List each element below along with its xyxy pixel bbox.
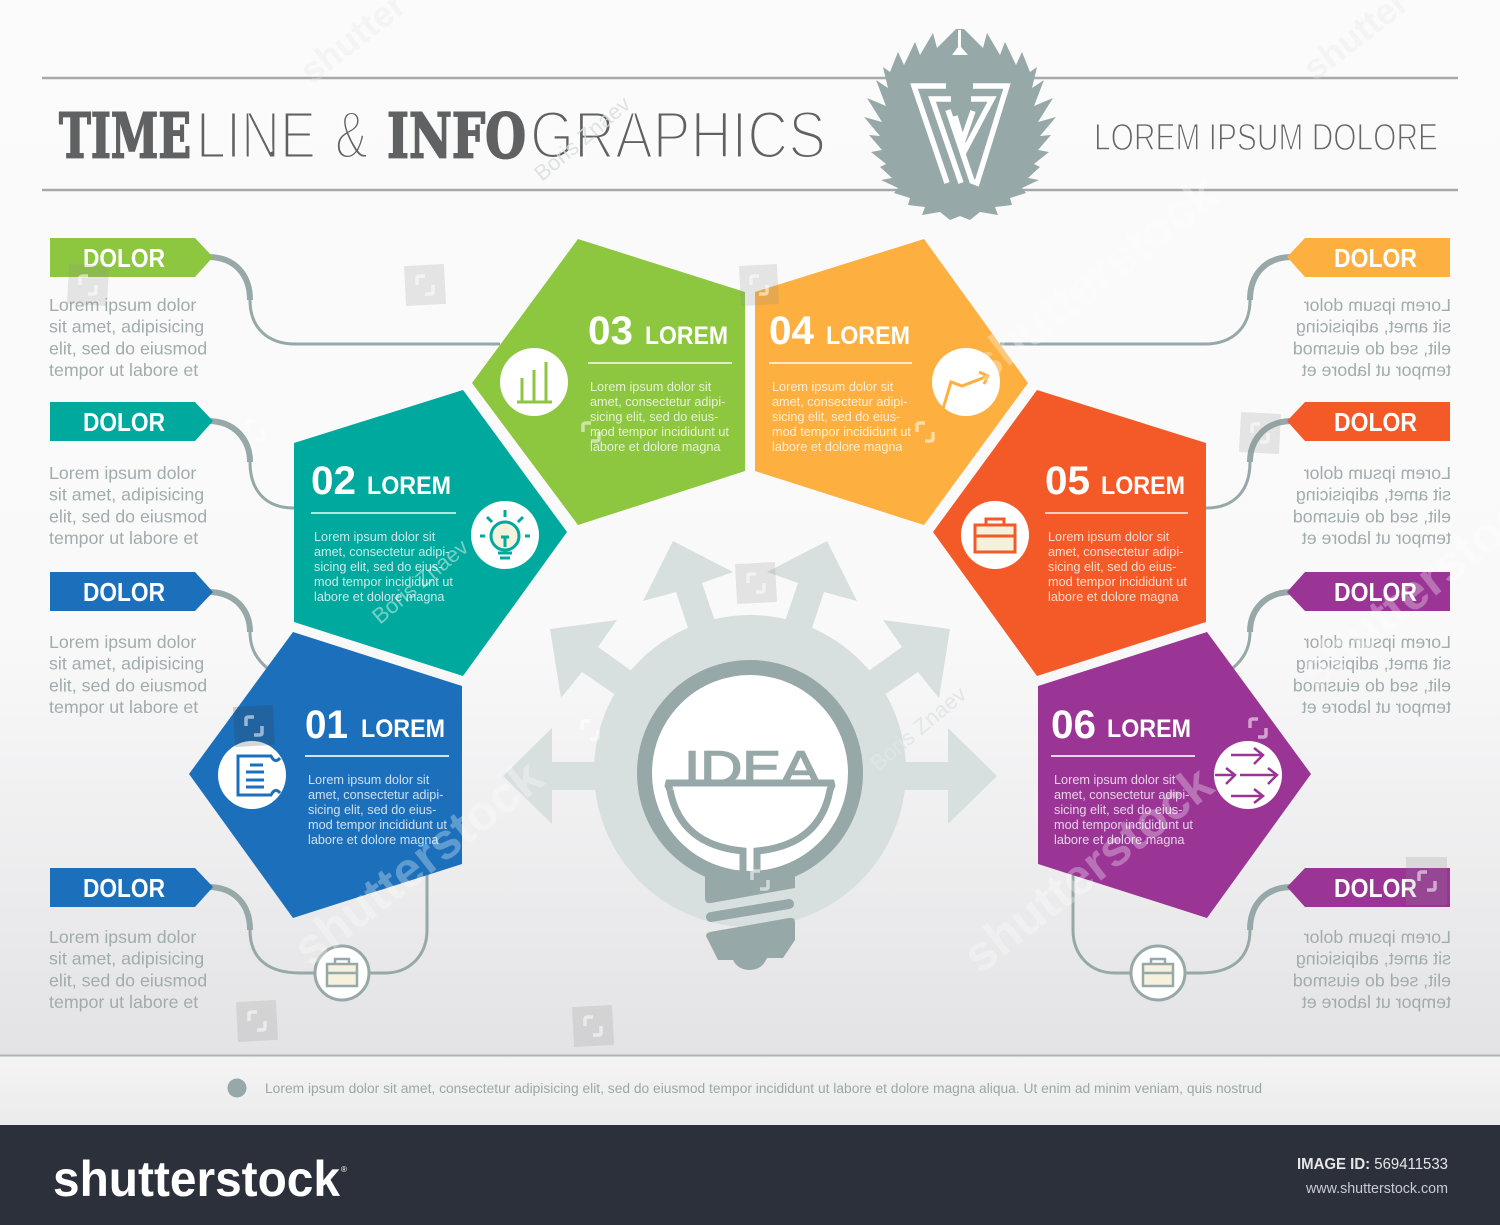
tag: dolor green: DOLOR	[83, 243, 165, 273]
title: &	[335, 98, 368, 173]
tag: dolor blue	[50, 572, 213, 611]
body 06: Lorem ipsum dolor sit	[1054, 773, 1176, 787]
footer bar	[0, 1125, 1500, 1225]
body 06: labore et dolore magna	[1054, 833, 1185, 847]
heading 04: LOREM	[826, 322, 910, 350]
tag: dolor blue lower: DOLOR	[83, 873, 165, 903]
watermarks: Boris Znaev	[865, 681, 971, 776]
footnote text: Lorem ipsum dolor sit amet, consectetur adipisicing elit, sed do eiusmod tempor incididunt ut labore et dolore magna aliqua. Ut enim ad minim veniam, quis nostrud	[265, 1081, 1262, 1096]
body 02: mod tempor incididunt ut	[314, 575, 453, 589]
icon: briefcase node right	[1131, 946, 1185, 1000]
heading 05	[1045, 459, 1185, 503]
body 04: mod tempor incididunt ut	[772, 425, 911, 439]
body 06: mod tempor incididunt ut	[1054, 818, 1193, 832]
body 01: mod tempor incididunt ut	[308, 818, 447, 832]
arrows around bulb	[503, 541, 997, 927]
body 06: sicing elit, sed do eius-	[1054, 803, 1182, 817]
tag: dolor purple: DOLOR	[1334, 577, 1417, 607]
body 01: labore et dolore magna	[308, 833, 439, 847]
body 04: Lorem ipsum dolor sit	[772, 380, 894, 394]
side text right mirrored 3: elit, sed do eiusmod	[1293, 675, 1451, 695]
watermarks: shutterstock	[957, 165, 1228, 394]
side text left 4: tempor ut labore et	[49, 992, 198, 1012]
tag: dolor amber: DOLOR	[1334, 243, 1417, 273]
body 03: Lorem ipsum dolor sit	[590, 380, 712, 394]
side text right mirrored 1: elit, sed do eiusmod	[1293, 338, 1451, 358]
heading 06: 06	[1051, 703, 1096, 747]
side text right mirrored 1: tempor ut labore et	[1302, 360, 1451, 380]
body 02: sicing elit, sed do eius-	[314, 560, 442, 574]
side text left 2: tempor ut labore et	[49, 528, 198, 548]
body 02: Lorem ipsum dolor sit	[314, 530, 436, 544]
panel 05	[933, 390, 1206, 676]
side text left 1: Lorem ipsum dolor	[49, 295, 196, 315]
title	[59, 98, 826, 173]
body 04: sicing elit, sed do eius-	[772, 410, 900, 424]
side text left 2: sit amet, adipisicing	[49, 485, 204, 505]
tag: dolor teal: DOLOR	[83, 407, 165, 437]
heading 02: LOREM	[367, 472, 451, 500]
body 05: amet, consectetur adipi-	[1048, 545, 1183, 559]
body 01: amet, consectetur adipi-	[308, 788, 443, 802]
side text left 3: elit, sed do eiusmod	[49, 675, 207, 695]
panel 04	[755, 239, 1028, 525]
side text right mirrored 3: sit amet, adipisicing	[1296, 654, 1451, 674]
panel 01	[189, 632, 462, 918]
side text left 4: elit, sed do eiusmod	[49, 970, 207, 990]
icon: growth chart	[932, 348, 1000, 416]
icon: document	[218, 741, 286, 809]
body 02: amet, consectetur adipi-	[314, 545, 449, 559]
side text right mirrored 4: Lorem ipsum dolor	[1304, 927, 1451, 947]
site url: www.shutterstock.com	[1305, 1181, 1448, 1197]
badge logo	[864, 29, 1056, 220]
panel 06	[1038, 632, 1311, 918]
title: GRAPHICS	[530, 98, 826, 173]
bulb base	[705, 877, 795, 970]
body 05: Lorem ipsum dolor sit	[1048, 530, 1170, 544]
heading 04: 04	[769, 309, 815, 353]
heading 05: LOREM	[1101, 472, 1185, 500]
image id: IMAGE ID: 569411533	[1297, 1156, 1448, 1173]
heading 06: LOREM	[1107, 715, 1191, 743]
heading 03	[588, 309, 728, 353]
side text right mirrored 1: sit amet, adipisicing	[1296, 317, 1451, 337]
tag: dolor orange	[1287, 402, 1450, 441]
tag: dolor teal	[50, 402, 213, 441]
watermarks: shutterstock	[282, 748, 553, 977]
tag: dolor orange: DOLOR	[1334, 407, 1417, 437]
footnote dot	[228, 1078, 246, 1098]
side text left 2: elit, sed do eiusmod	[49, 506, 207, 526]
heading 03: 03	[588, 309, 633, 353]
bottom band	[0, 1054, 1500, 1125]
side text right mirrored 4: elit, sed do eiusmod	[1293, 970, 1451, 990]
side text right mirrored 2: elit, sed do eiusmod	[1293, 506, 1451, 526]
side text left 3: Lorem ipsum dolor	[49, 632, 196, 652]
connectors left	[208, 257, 500, 973]
shutterstock logo: shutterstock	[53, 1151, 340, 1207]
side text right mirrored 2: Lorem ipsum dolor	[1304, 463, 1451, 483]
side text right mirrored 4: tempor ut labore et	[1302, 992, 1451, 1012]
body 03: mod tempor incididunt ut	[590, 425, 729, 439]
side text right mirrored 3: tempor ut labore et	[1302, 697, 1451, 717]
title: TIME	[59, 100, 191, 172]
heading 06	[1051, 703, 1191, 747]
side text left 1: elit, sed do eiusmod	[49, 338, 207, 358]
registered mark: ®	[341, 1165, 347, 1174]
title: INFO	[387, 100, 526, 172]
body 03: sicing elit, sed do eius-	[590, 410, 718, 424]
heading 01	[305, 703, 445, 747]
body 01: sicing elit, sed do eius-	[308, 803, 436, 817]
tag: dolor blue: DOLOR	[83, 577, 165, 607]
side text left 1: tempor ut labore et	[49, 360, 198, 380]
tag: dolor purple	[1287, 572, 1450, 611]
side text left 4: Lorem ipsum dolor	[49, 927, 196, 947]
heading 02	[311, 459, 451, 503]
tag: dolor green	[50, 238, 213, 277]
tag: dolor purple lower: DOLOR	[1334, 873, 1417, 903]
body 04: amet, consectetur adipi-	[772, 395, 907, 409]
body 02: labore et dolore magna	[314, 590, 445, 604]
panel 03	[472, 239, 745, 525]
bulb filament	[666, 783, 834, 880]
side text left 2: Lorem ipsum dolor	[49, 463, 196, 483]
idea label: IDEA	[684, 741, 821, 794]
side text right mirrored 2: tempor ut labore et	[1302, 528, 1451, 548]
heading 01: LOREM	[361, 715, 445, 743]
watermarks: shutterstock	[952, 755, 1223, 984]
body 05: sicing elit, sed do eius-	[1048, 560, 1176, 574]
body 05: labore et dolore magna	[1048, 590, 1179, 604]
heading 01: 01	[305, 703, 348, 747]
header rules	[42, 78, 1458, 190]
tag: dolor purple lower	[1287, 868, 1450, 907]
watermarks: Boris Znaev	[367, 534, 473, 629]
side text left 3: tempor ut labore et	[49, 697, 198, 717]
panel 02	[294, 390, 567, 676]
body 01: Lorem ipsum dolor sit	[308, 773, 430, 787]
body 03: amet, consectetur adipi-	[590, 395, 725, 409]
heading 05: 05	[1045, 459, 1090, 503]
body 03: labore et dolore magna	[590, 440, 721, 454]
icon: light bulb	[471, 501, 539, 569]
bulb globe	[644, 668, 856, 878]
tag: dolor amber	[1287, 238, 1450, 277]
heading 02: 02	[311, 459, 356, 503]
watermarks: Boris Znaev	[529, 91, 635, 186]
body 05: mod tempor incididunt ut	[1048, 575, 1187, 589]
tag: dolor blue lower	[50, 868, 213, 907]
body 06: amet, consectetur adipi-	[1054, 788, 1189, 802]
central idea bulb	[503, 541, 997, 970]
side text right mirrored 2: sit amet, adipisicing	[1296, 485, 1451, 505]
side text right mirrored 4: sit amet, adipisicing	[1296, 949, 1451, 969]
icon: briefcase	[961, 501, 1029, 569]
side text left 3: sit amet, adipisicing	[49, 654, 204, 674]
title: LINE	[196, 98, 316, 173]
icon: arrows	[1214, 741, 1282, 809]
connectors right	[1000, 257, 1292, 973]
side text left 1: sit amet, adipisicing	[49, 317, 204, 337]
icon: briefcase node left	[315, 946, 369, 1000]
heading 03: LOREM	[645, 322, 728, 350]
side text right mirrored 3: Lorem ipsum dolor	[1304, 632, 1451, 652]
icon: bars	[500, 348, 568, 416]
side text left 4: sit amet, adipisicing	[49, 949, 204, 969]
heading 04	[769, 309, 910, 353]
body 04: labore et dolore magna	[772, 440, 903, 454]
side text right mirrored 1: Lorem ipsum dolor	[1304, 295, 1451, 315]
